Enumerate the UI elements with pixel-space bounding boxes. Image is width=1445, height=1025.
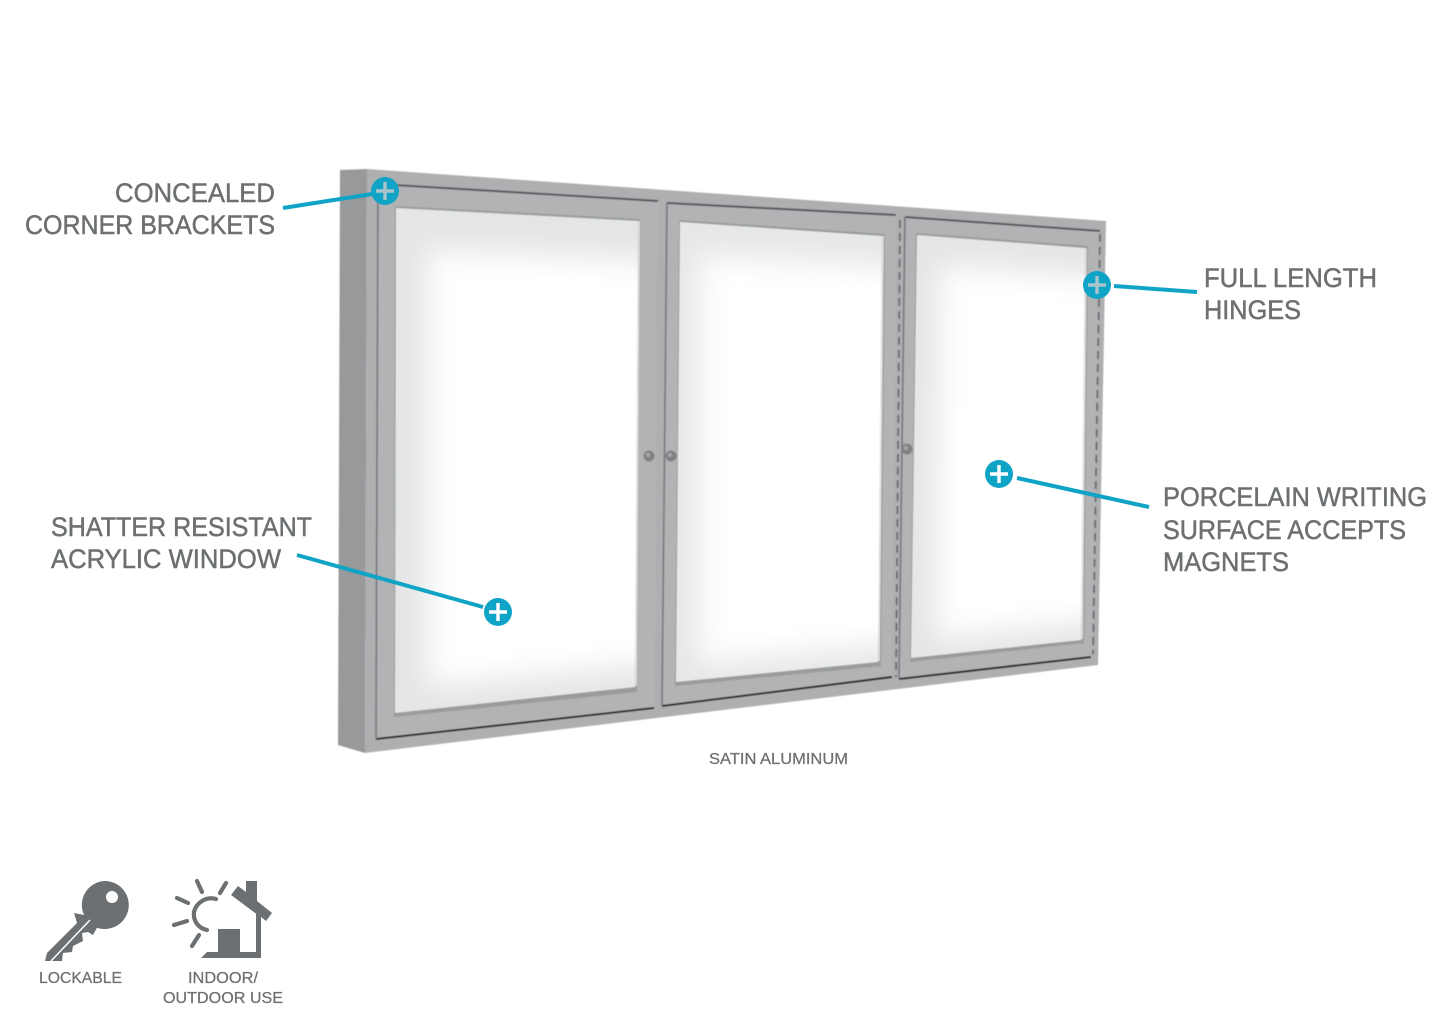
icon: key [45,881,129,961]
finish caption: SATIN ALUMINUM [709,751,848,768]
icon: sun and house [174,881,272,958]
callout: porcelain writing surface: PORCELAIN WRITING [1163,482,1427,512]
callout: full length hinges: HINGES [1204,295,1301,325]
door 2 knob [666,450,676,462]
callout: porcelain writing surface: MAGNETS [1163,547,1289,577]
door 1 [376,184,670,739]
label: indoor outdoor use: INDOOR/ [188,970,259,987]
door 2 [662,203,910,706]
cabinet side face [338,169,367,753]
callout: full length hinges [1083,263,1377,325]
door 3 knob [902,444,912,454]
callout: concealed corner brackets [25,177,399,240]
callout: shatter resistant acrylic window [51,512,512,626]
callout: full length hinges: FULL LENGTH [1204,263,1377,293]
door 3 [899,217,1110,679]
callout: concealed corner brackets: CORNER BRACKETS [25,210,275,240]
callout: concealed corner brackets: CONCEALED [115,178,275,208]
cabinet front frame [365,169,1106,753]
callout: porcelain writing surface [985,460,1427,577]
label: indoor outdoor use: OUTDOOR USE [163,990,283,1007]
door 1 knob [644,450,654,462]
callout: shatter resistant acrylic window: SHATTER RESISTANT [51,512,312,542]
label: indoor outdoor use [163,970,283,1007]
display case: three door aluminum cabinet [338,169,1110,753]
callout: shatter resistant acrylic window: ACRYLIC WINDOW [51,544,281,574]
callout: porcelain writing surface: SURFACE ACCEPTS [1163,515,1406,545]
hinge dashes [896,220,1100,677]
label: lockable: LOCKABLE [39,970,122,987]
